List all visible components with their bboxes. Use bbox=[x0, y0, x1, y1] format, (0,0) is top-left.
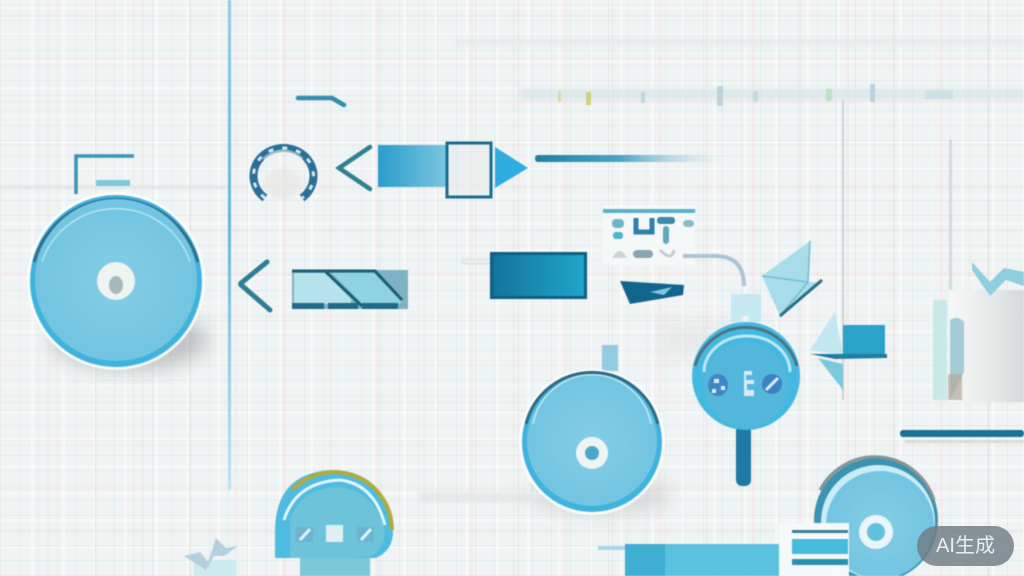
chevron top bbox=[339, 147, 370, 189]
bracket icon bbox=[76, 156, 134, 194]
bottom right disc bbox=[814, 457, 938, 576]
right arrow block bbox=[810, 312, 887, 390]
dark pennant bbox=[620, 281, 684, 304]
right side pillar bbox=[933, 262, 1024, 402]
large left disc with bracket bbox=[27, 156, 208, 370]
badge: AI generated bbox=[917, 526, 1014, 566]
bottom dome with glyphs bbox=[275, 470, 393, 576]
small stub above mid disc bbox=[602, 345, 618, 371]
teal rectangle bbox=[492, 254, 586, 298]
tab above small disc bbox=[731, 294, 761, 322]
bottom-left squiggle icon bbox=[184, 538, 238, 576]
badge: AI generated: AI生成 bbox=[936, 535, 995, 557]
top short connector bbox=[298, 98, 344, 105]
origami icon bbox=[762, 241, 822, 316]
striped panel bbox=[292, 270, 408, 309]
right horizontal divider bbox=[900, 430, 1024, 437]
long fading line bbox=[535, 155, 725, 162]
arrow: bar, box and head bbox=[378, 143, 528, 197]
vertical axis line bbox=[228, 0, 231, 490]
card over bottom disc bbox=[779, 523, 849, 576]
horseshoe ring icon bbox=[254, 148, 314, 200]
chevron lower bbox=[240, 262, 270, 310]
mid disc bbox=[519, 369, 670, 515]
glyph table bbox=[603, 205, 695, 265]
top strip of tiny markers bbox=[558, 84, 953, 106]
curved connector bbox=[683, 256, 744, 286]
small disc with glyphs bbox=[692, 322, 800, 430]
bottom bar bbox=[598, 544, 780, 576]
center small connector bbox=[462, 259, 492, 264]
stem under small disc bbox=[736, 425, 751, 486]
